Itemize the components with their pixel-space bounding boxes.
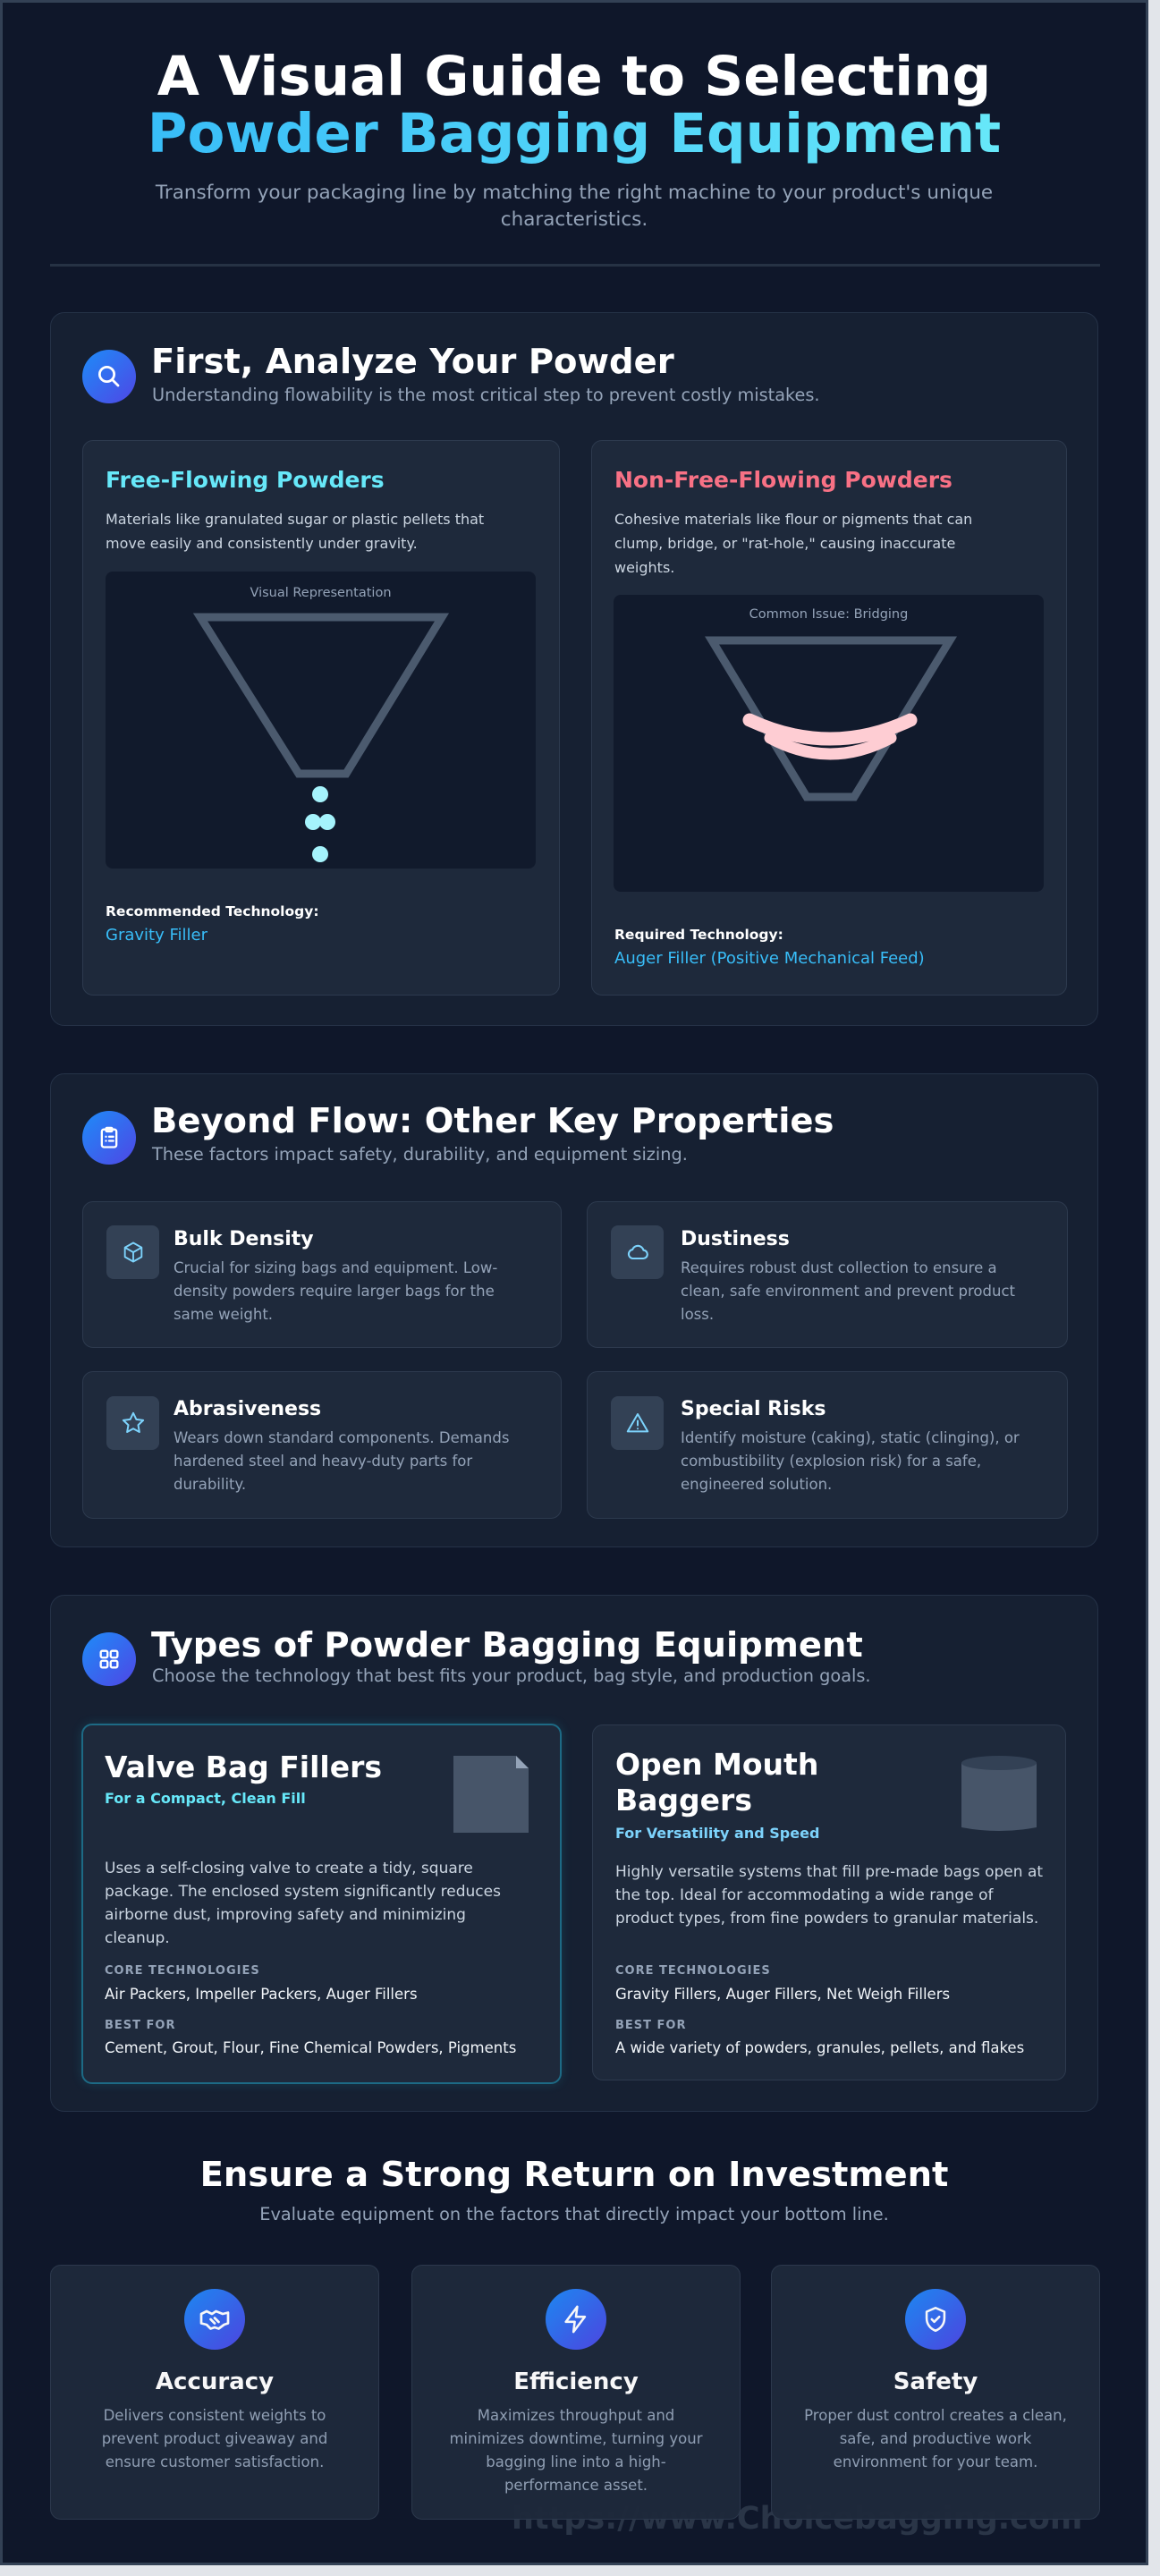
card description: Cohesive materials like flour or pigments that can clump, bridge, or "rat-hole," causing inaccurate weights. [614, 511, 972, 576]
card: open mouth baggers: Baggers [615, 1783, 752, 1818]
icon: lightning [546, 2289, 606, 2350]
title [148, 45, 1001, 165]
ROI card: efficiency: Efficiency [513, 2368, 639, 2395]
property: dustiness: Requires robust dust collection to ensure a clean, safe environment and prevent product loss. [681, 1259, 1015, 1323]
card: valve bag fillers: Valve Bag Fillers [105, 1750, 382, 1784]
card: valve bag fillers: Uses a self-closing valve to create a tidy, square package. The enclosed system significantly reduces airborne dust, improving safety and minimizing cleanup. [105, 1860, 501, 1947]
card: open mouth baggers: For Versatility and Speed [615, 1825, 819, 1842]
heading: Beyond Flow: Other Key Properties [151, 1101, 834, 1141]
property: special risks [587, 1371, 1068, 1519]
visual: bridging funnel [614, 595, 1044, 892]
icon: star [106, 1396, 159, 1450]
subheading: ROI: Evaluate equipment on the factors that directly impact your bottom line. [259, 2204, 889, 2224]
card: valve bag fillers: For a Compact, Clean Fill [105, 1790, 306, 1807]
recommended technology [106, 903, 319, 945]
card: valve bag fillers: Air Packers, Impeller Packers, Auger Fillers [105, 1986, 418, 2003]
property: dustiness [587, 1201, 1068, 1348]
ROI card: safety: Safety [893, 2368, 978, 2395]
card: valve bag fillers: BEST FOR [105, 2019, 175, 2032]
icon: grid [82, 1632, 136, 1686]
visual: bridging funnel: Common Issue: Bridging [749, 607, 908, 622]
card: open mouth baggers: BEST FOR [615, 2019, 687, 2032]
visual: gravity funnel: Visual Representation [250, 586, 392, 600]
subheading: Choose the technology that best fits your product, bag style, and production goals. [152, 1665, 871, 1686]
card: open mouth baggers: Open Mouth [615, 1747, 818, 1782]
card title: Free-Flowing Powders [106, 467, 385, 493]
panel: analyze your powder [50, 312, 1098, 1026]
card: free-flowing [82, 440, 560, 996]
recommended technology: Recommended Technology: [106, 903, 319, 919]
icon: cloud [611, 1225, 664, 1279]
recommended technology: Gravity Filler [106, 926, 207, 945]
card: open mouth baggers [592, 1724, 1066, 2080]
property: bulk density [82, 1201, 562, 1348]
icon: shield [905, 2289, 966, 2350]
icon: handshake [184, 2289, 245, 2350]
card: valve bag fillers: CORE TECHNOLOGIES [105, 1964, 260, 1978]
card: open mouth baggers: Highly versatile systems that fill pre-made bags open at the top. Ideal for accommodating a wide range of product types, from fine powders to granular materials. [615, 1863, 1043, 1928]
visual: gravity funnel [106, 572, 536, 869]
card: non-free-flowing [591, 440, 1067, 996]
title: Powder Bagging Equipment [148, 102, 1001, 165]
icon: cube [106, 1225, 159, 1279]
icon: clipboard [82, 1111, 136, 1165]
subheading: These factors impact safety, durability, and equipment sizing. [152, 1144, 688, 1165]
ROI card: accuracy [50, 2265, 379, 2520]
icon: warning [611, 1396, 664, 1450]
property: special risks: Special Risks [681, 1398, 826, 1420]
panel: other key properties [50, 1073, 1098, 1547]
ROI card: efficiency [411, 2265, 741, 2520]
ROI card: safety [771, 2265, 1100, 2520]
panel: types of equipment [50, 1595, 1098, 2112]
icon: open mouth bag [961, 1756, 1037, 1831]
property: bulk density: Bulk Density [174, 1228, 314, 1250]
required technology [614, 927, 925, 968]
card: open mouth baggers: A wide variety of powders, granules, pellets, and flakes [615, 2039, 1024, 2056]
subtitle: Transform your packaging line by matching the right machine to your product's unique characteristics. [156, 182, 993, 231]
card: valve bag fillers: Cement, Grout, Flour, Fine Chemical Powders, Pigments [105, 2039, 516, 2056]
ROI card: accuracy: Delivers consistent weights to prevent product giveaway and ensure customer satisfaction. [102, 2407, 327, 2470]
heading: Types of Powder Bagging Equipment [151, 1625, 863, 1665]
card: valve bag fillers [81, 1724, 562, 2084]
heading: ROI: Ensure a Strong Return on Investment [200, 2155, 948, 2195]
property: bulk density: Crucial for sizing bags and equipment. Low-density powders require larger bags for the same weight. [174, 1259, 497, 1323]
ROI card: safety: Proper dust control creates a clean, safe, and productive work environment for your team. [804, 2407, 1067, 2470]
icon: magnifier [82, 350, 136, 403]
ROI card: efficiency: Maximizes throughput and minimizes downtime, turning your bagging line into a high-performance asset. [449, 2407, 703, 2494]
card: open mouth baggers: CORE TECHNOLOGIES [615, 1964, 771, 1978]
property: dustiness: Dustiness [681, 1228, 790, 1250]
subheading: Understanding flowability is the most critical step to prevent costly mistakes. [152, 385, 820, 405]
ROI card: accuracy: Accuracy [156, 2368, 274, 2395]
card description: Materials like granulated sugar or plastic pellets that move easily and consistently under gravity. [106, 511, 484, 552]
property: abrasiveness: Wears down standard components. Demands hardened steel and heavy-duty parts for durability. [174, 1429, 509, 1493]
icon: valve bag [453, 1756, 529, 1833]
property: abrasiveness: Abrasiveness [174, 1398, 321, 1420]
required technology: Required Technology: [614, 927, 783, 943]
title: A Visual Guide to Selecting [157, 45, 991, 108]
card title: Non-Free-Flowing Powders [614, 467, 953, 493]
heading: First, Analyze Your Powder [151, 342, 674, 382]
watermark: https://www.Choicebagging.com [512, 2501, 1082, 2537]
property: special risks: Identify moisture (caking), static (clinging), or combustibility (explosion risk) for a safe, engineered solution. [681, 1429, 1020, 1493]
card: open mouth baggers: Gravity Fillers, Auger Fillers, Net Weigh Fillers [615, 1986, 950, 2003]
property: abrasiveness [82, 1371, 562, 1519]
required technology: Auger Filler (Positive Mechanical Feed) [614, 949, 925, 968]
